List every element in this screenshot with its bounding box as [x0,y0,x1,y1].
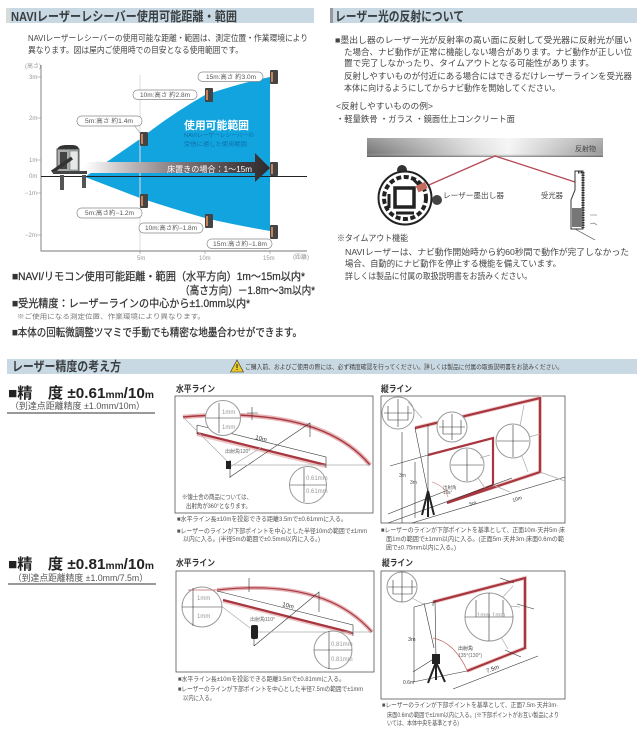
axes and ticks: −2m [25,233,37,239]
accuracy spec 0.61: （到達点距離精度 ±1.0mm/10m） [10,400,145,411]
laser arc [183,415,370,465]
icon: laser level instrument [52,145,87,190]
heading: laser accuracy: レーザー精度の考え方 [12,359,121,374]
reflection explanation: ■墨出し器のレーザー光が反射率の高い面に反射して受光器に反射光が届い [335,35,632,45]
caption 0.81 horizontal: 以内に入る。 [183,693,215,702]
dimension lines: 5m [469,500,477,508]
emission angle arc: 135°(130°) [458,653,482,659]
panel: vertical line 7.5m [381,557,565,699]
axes and ticks: 2m [29,116,37,122]
intro text [28,33,308,55]
icon: device [226,461,231,469]
panel: vertical line 10m [381,383,565,523]
heading: laser accuracy [7,359,637,374]
pink laser wall [433,578,525,671]
magnifier circles [182,587,353,669]
axes and ticks: 0m [29,174,37,180]
magnifier circles: 0.81mm [331,642,353,648]
callout: 15m down [207,239,272,248]
magnifier circles [387,572,520,649]
panel title: 縦ライン [381,383,412,394]
caption 0.61 vertical [381,525,565,552]
magnifier circles: 0.61mm [306,476,328,482]
caption 0.81 vertical: 床面0.6mの範囲で±1mm以内に入る。(※下部ポイントがお互い製品により [387,710,559,719]
labels: 出射角120° [225,448,250,455]
icon: tripod [428,654,445,683]
magnifier circles: 0.81mm [331,657,353,663]
axes and ticks: 10m [199,256,211,262]
icon: device [251,625,258,639]
specification list [12,269,316,339]
caption 0.81 horizontal [178,674,363,702]
usable range label: 受信に適した使用範囲 [184,140,248,148]
axes and ticks: (高さ) [25,62,41,70]
accuracy spec 0.61: ■精 度 ±0.61mm/10m [8,384,154,402]
measurement lines [184,407,370,478]
emission angle arc [433,638,482,670]
magnifier circles: 1mm 1mm [477,613,505,619]
axes and ticks: (距離) [293,253,309,261]
warning text: ご購入前、およびご使用の際には、必ず精度確認を行ってください。詳しくは製品に付属の取扱説明書をお読みください。 [245,362,563,371]
caption 0.81 vertical [382,700,559,727]
accuracy spec 0.81: （到達点距離精度 ±1.0mm/7.5m） [13,572,148,583]
note: 出射角が360°となります。 [186,501,251,510]
labels: 10m [255,435,267,444]
axes and ticks: 15m [263,256,275,262]
reflection explanation: 反射しやすいものが付近にある場合にはできるだけレーザーラインを受光器 [344,71,632,81]
reflector bar: 反射物 [575,144,596,153]
axes and ticks: 3m [29,75,37,81]
receiver side view [571,171,597,240]
emission angle arc: 135° [443,490,453,495]
callout: 10m up [133,90,197,100]
reflective materials list [336,101,515,124]
panel title: 水平ライン [176,557,215,568]
accuracy spec 0.61 [7,384,155,413]
measurement lines [217,578,372,646]
axes and ticks: 5m [137,256,145,262]
panel: horizontal line 7.5m [176,557,374,672]
timeout function note: ※タイムアウト機能 [337,233,408,243]
dimension lines: 7.5m [486,665,500,675]
usable range label: 使用可能範囲 [184,118,249,132]
floor placement arrow: 床置きの場合：1～15m [167,164,252,174]
dimension lines: 0.6m [403,680,414,686]
heading: usable range: NAVIレーザーレシーバー使用可能距離・範囲 [11,9,237,24]
magnifier circles: 1mm [197,596,210,602]
labels: 10m [282,602,294,611]
caption 0.61 vertical: ■レーザーのラインが下部ポイントを基準として、正面10m·天井5m·床 [381,525,565,534]
timeout function note: 場合、自動的にナビ動作を停止する機能を備えています。 [345,258,561,268]
reflection explanation: 置で完了しなかったり、タイムアウトとなる可能性があります。 [344,58,594,68]
red laser lines [415,398,540,503]
panel title: 縦ライン [382,557,413,568]
callout: 10m down [139,223,203,233]
emission angle arc: 出射角 [458,645,473,652]
dimension lines [388,424,565,523]
callout: 5m up: 5m:高さ 約1.4m [85,117,133,125]
magnifier circles [206,400,328,504]
callout: 5m down [77,208,142,218]
caption 0.61 horizontal [177,514,367,543]
labels [225,435,267,455]
dimension lines: 3m [410,480,417,486]
reflector bar [367,138,603,157]
reflective materials list: ・軽量鉄骨 ・ガラス ・鏡面仕上コンクリート面 [336,114,515,124]
magnifier circles: 0.61mm [306,489,328,495]
laser level top view [378,165,442,224]
callout: 15m up: 15m:高さ 約3.0m [206,73,256,81]
reflected laser line [422,156,575,188]
icon: receivers [140,70,278,239]
accuracy spec 0.81 [8,555,156,584]
callout: 5m up [77,116,142,133]
emission angle arc: 出射角 [443,484,456,491]
reflection explanation: 本体に向けるようにしてからナビ動作を開始してください。 [344,83,560,93]
reflective materials list: <反射しやすいものの例> [336,101,433,111]
magnifier circles: 1mm [197,614,210,620]
timeout function note: 詳しくは製品に付属の取扱説明書をお読みください。 [345,271,532,281]
laser arc [217,588,372,632]
red laser lines [433,578,525,671]
caption 0.81 vertical: いては、本体中央を基準とする) [387,718,459,727]
panel: horizontal line 10m [175,383,373,513]
dimension lines: 3m [399,473,406,479]
icon: tripod [422,491,434,517]
labels: 出射角110° [250,616,275,623]
dimension lines [403,578,538,689]
laser level label: レーザー墨出し器 [443,190,504,200]
magnifier circles: 1mm [222,410,235,416]
axes and ticks: 1m [29,158,37,164]
timeout function note [337,233,629,281]
receiver label: 受光器 [541,190,563,200]
pink laser wall [415,398,540,502]
labels [250,602,294,623]
emission angle arc [432,482,456,497]
specification list: ■NAVI/リモコン使用可能距離・範囲（水平方向）1m～15m以内* [12,269,306,283]
axes and ticks [25,62,309,262]
icon: warning triangle [230,360,244,372]
usable range label [184,118,254,148]
specification list: ■受光精度：レーザーラインの中心から±1.0mm以内* [12,296,251,310]
caption 0.81 vertical: ■レーザーのラインが下部ポイントを基準として、正面7.5m·天井3m· [382,700,558,709]
panel frame [176,571,374,672]
intro text: 異なります。図は屋内ご使用時での目安となる使用範囲です。 [28,45,243,55]
callout: 15m down: 15m:高さ約−1.8m [213,240,267,248]
intro text: NAVIレーザーレシーバーの使用可能な距離・範囲は、測定位置・作業環境により [28,33,308,43]
floor placement arrow [85,153,270,182]
callout: 5m down: 5m:高さ約−1.2m [85,209,134,217]
specification list: （高さ方向）－1.8m～3m以内* [180,283,316,297]
caption 0.61 horizontal: ■水平ライン長±10mを投影できる距離3.5mで±0.61mmに入る。 [177,514,347,523]
note: ※懐士舎の商品については、 [182,492,252,501]
reflection explanation: た場合、ナビ動作が正常に機能しない場合があります。ナビ動作が正しい位 [344,47,632,57]
usable range label: NAVIレーザーレシーバーの [184,132,254,139]
heading: laser reflection: レーザー光の反射について [335,9,464,24]
panel title: 水平ライン [176,383,215,394]
magnifier circles [382,397,540,488]
panel frame [381,396,565,523]
callout: 10m down: 10m:高さ約−1.8m [145,224,197,232]
caption 0.61 vertical: 囲で±0.75mm以内に入る。) [386,542,456,552]
reflection explanation [335,35,632,93]
dimension lines: 10m [512,495,523,504]
caption 0.81 horizontal: ■レーザーのラインが下部ポイントを中心とした半径7.5mの範囲で±1mm [178,684,363,693]
blue usable range area [85,77,270,231]
caption 0.61 vertical: 面1mの範囲で±1mm以内に入る。(正面5m·天井3m·床面0.6mの範 [386,534,564,543]
panel frame [175,396,373,513]
panel frame [381,571,565,699]
heading: laser reflection [330,8,637,24]
caption 0.61 horizontal: ■レーザーのラインが下部ポイントを中心とした半径10mの範囲で±1mm [177,526,367,535]
accuracy spec 0.81: ■精 度 ±0.81mm/10m [8,555,154,573]
specification list: ※ご使用になる測定位置、作業環境により異なります。 [17,312,205,320]
axes and ticks: −1m [25,191,37,197]
dimension lines: 3m [408,637,416,643]
magnifier circles: 1mm [222,425,235,431]
caption 0.61 horizontal: 以内に入る。(半径5mの範囲で±0.5mm以内に入る。) [183,534,320,543]
callout: 15m up [198,72,263,82]
reflection diagram [367,138,603,240]
specification list: ■本体の回転微調整ツマミで手動でも精密な地墨合わせができます。 [12,325,302,339]
caption 0.81 horizontal: ■水平ライン長±10mを投影できる距離3.5mで±0.81mmに入る。 [178,674,345,683]
note [182,492,252,510]
timeout function note: NAVIレーザーは、ナビ動作開始時から約60秒間で動作が完了しなかった [345,247,629,257]
range chart [25,62,309,262]
callout: 10m up: 10m:高さ 約2.8m [140,91,190,99]
